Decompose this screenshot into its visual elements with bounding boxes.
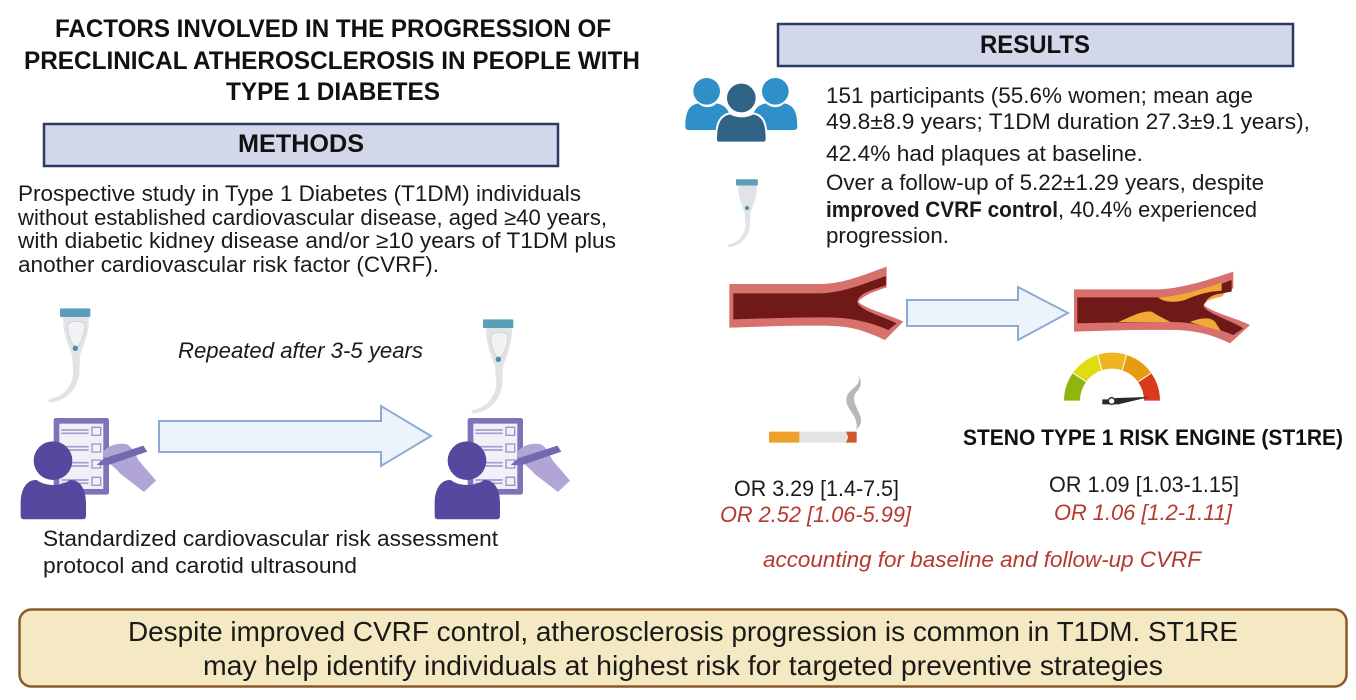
text block: study description: another cardiovascular risk factor (CVRF).	[18, 252, 439, 277]
label: repeated after 3-5 years: Repeated after 3-5 years	[178, 338, 423, 363]
odds ratios: smoking: OR 2.52 [1.06-5.99]	[720, 502, 912, 527]
icon: person with checklist 1	[21, 418, 156, 519]
text block: assessment protocol: Standardized cardiovascular risk assessment	[43, 526, 498, 551]
heading: results: RESULTS	[980, 31, 1090, 59]
odds ratios: smoking	[720, 476, 912, 527]
icon: artery with plaque	[1074, 272, 1250, 343]
arrow: methods repeat	[159, 406, 431, 466]
text block: results summary: 42.4% had plaques at baseline.	[826, 141, 1143, 166]
callout: conclusion: may help identify individuals at highest risk for targeted preventive strategies	[203, 650, 1163, 681]
heading: methods: METHODS	[238, 130, 364, 158]
odds ratios: smoking: OR 3.29 [1.4-7.5]	[734, 476, 899, 501]
icon: person with checklist 2	[435, 418, 570, 519]
text block: results summary: progression.	[826, 223, 949, 248]
title: TYPE 1 DIABETES	[226, 78, 440, 106]
icon: participants group	[685, 78, 797, 143]
text block: results summary: 151 participants (55.6% women; mean age	[826, 83, 1253, 108]
text block: assessment protocol: protocol and carotid ultrasound	[43, 553, 357, 578]
text block: results summary: 49.8±8.9 years; T1DM duration 27.3±9.1 years),	[826, 109, 1310, 134]
icon: risk gauge	[1072, 354, 1152, 404]
icon: ultrasound probe 1	[49, 308, 90, 403]
text block: results summary: improved CVRF control	[826, 197, 1058, 222]
text block: study description: with diabetic kidney disease and/or ≥10 years of T1DM plus	[17, 228, 616, 253]
title	[24, 15, 640, 106]
text block: results summary: Over a follow-up of 5.22±1.29 years, despite	[826, 170, 1264, 195]
label: steno type 1 risk engine: STENO TYPE 1 RISK ENGINE (ST1RE)	[963, 425, 1343, 450]
icon: ultrasound probe 2	[472, 319, 513, 414]
text block: assessment protocol	[43, 526, 498, 578]
icon: cigarette	[769, 375, 861, 443]
icon: healthy artery	[729, 267, 903, 340]
title: FACTORS INVOLVED IN THE PROGRESSION OF	[55, 15, 611, 43]
odds ratios: st1re	[1049, 472, 1239, 525]
callout: conclusion	[20, 610, 1346, 686]
heading: methods	[44, 124, 558, 166]
text block: study description	[17, 181, 616, 277]
odds ratios: st1re: OR 1.09 [1.03-1.15]	[1049, 472, 1239, 497]
arrow: progression	[907, 287, 1068, 340]
title: PRECLINICAL ATHEROSCLEROSIS IN PEOPLE WITH	[24, 47, 640, 75]
text block: study description: without established cardiovascular disease, aged ≥40 years,	[17, 205, 607, 230]
text block: results summary	[826, 83, 1310, 248]
heading: results	[778, 24, 1293, 66]
icon: ultrasound probe 3	[728, 179, 758, 247]
note: adjustment: accounting for baseline and follow-up CVRF	[763, 547, 1203, 572]
callout: conclusion: Despite improved CVRF control, atherosclerosis progression is common in T1DM. ST1RE	[128, 616, 1238, 647]
odds ratios: st1re: OR 1.06 [1.2-1.11]	[1054, 500, 1233, 525]
text block: study description: Prospective study in Type 1 Diabetes (T1DM) individuals	[18, 181, 581, 206]
text block: results summary: , 40.4% experienced	[1058, 197, 1257, 222]
